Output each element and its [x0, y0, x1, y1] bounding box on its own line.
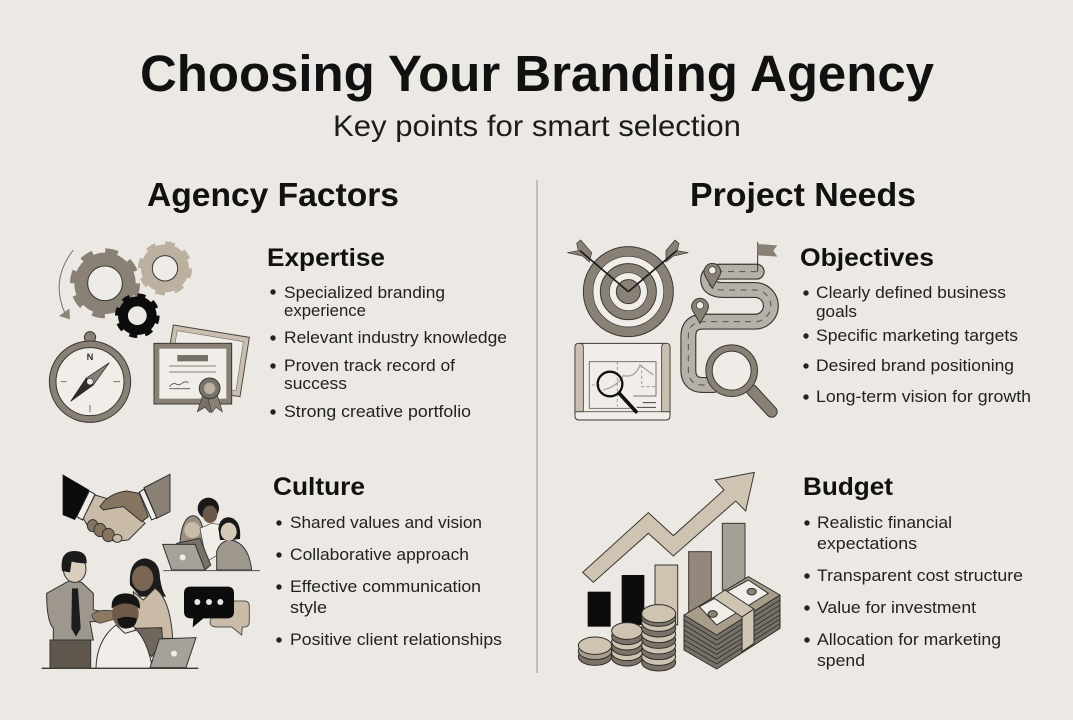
text block: Objectives — [800, 244, 1031, 406]
icon: blueprint map with magnifier — [575, 343, 670, 420]
icon: large magnifying glass — [709, 348, 772, 412]
text block: Expertise: Specialized branding — [284, 283, 445, 302]
text block: Expertise: Proven track record of — [284, 356, 455, 375]
text block: Expertise — [267, 244, 507, 421]
icon: target with arrows — [567, 240, 688, 337]
icon: small team at laptop — [163, 498, 260, 571]
icon: certificates with ribbon — [154, 325, 249, 413]
bar chart — [588, 523, 745, 627]
text block: Culture: Positive client relationships — [290, 630, 502, 649]
icon: standing woman — [130, 558, 173, 657]
text block: Culture: style — [290, 598, 327, 617]
icon: coin stacks — [578, 605, 676, 671]
text block: Culture: Shared values and vision — [290, 513, 482, 532]
text block: Culture: Culture — [273, 473, 365, 501]
icon group: expertise gears, compass and certificates — [49, 245, 249, 422]
icon: handshake — [63, 474, 170, 542]
icon: seated man with laptop — [42, 593, 198, 668]
text block: Culture: Effective communication — [290, 577, 481, 596]
icon group: culture people and handshake — [42, 474, 260, 668]
subtitle: Key points for smart selection — [333, 110, 741, 143]
icon: cash bundles — [684, 577, 780, 669]
text block: Budget: Transparent cost structure — [817, 566, 1023, 585]
text block: Objectives: goals — [816, 302, 857, 321]
text block: Expertise: Relevant industry knowledge — [284, 328, 507, 347]
text block: Budget: expectations — [817, 534, 917, 553]
text block: Budget: Realistic financial — [817, 513, 952, 532]
text block: Budget: Value for investment — [817, 598, 976, 617]
heading: Project Needs: Project Needs — [690, 176, 916, 213]
text block: Objectives: Desired brand positioning — [816, 356, 1014, 375]
text block: Expertise: experience — [284, 301, 366, 320]
icon: standing man — [47, 551, 115, 668]
icon: compass — [49, 332, 131, 422]
text block: Objectives: Long-term vision for growth — [816, 387, 1031, 406]
text block: Budget: spend — [817, 651, 865, 670]
icon group: budget chart, coins and cash — [578, 472, 780, 671]
icon: flag — [758, 242, 777, 272]
text block: Objectives: Specific marketing targets — [816, 326, 1018, 345]
text block: Expertise: success — [284, 374, 347, 393]
icon group: objectives target, road and map — [567, 240, 777, 420]
text block: Culture: Collaborative approach — [290, 545, 469, 564]
icon: large gear — [75, 253, 135, 313]
icon: location pins — [692, 263, 721, 323]
text block: Expertise: Strong creative portfolio — [284, 402, 471, 421]
heading: Agency Factors: Agency Factors — [147, 176, 399, 213]
icon: rising arrow — [583, 472, 754, 582]
icon: rotation arrow — [59, 250, 73, 319]
icon: medium gear — [142, 245, 188, 291]
icon: winding road — [688, 272, 771, 385]
text block: Objectives: Clearly defined business — [816, 283, 1006, 302]
text block: Culture — [273, 473, 502, 649]
text block: Budget: Budget — [803, 473, 894, 501]
text block: Expertise: Expertise — [267, 244, 385, 272]
icon: chat bubbles — [184, 587, 249, 635]
text block: Budget: Allocation for marketing — [817, 630, 1001, 649]
icon: small black gear — [119, 297, 156, 334]
icon: compass: N — [87, 352, 94, 362]
text block: Objectives: Objectives — [800, 244, 934, 272]
text block: Budget — [803, 473, 1023, 670]
title: Choosing Your Branding Agency — [140, 45, 935, 102]
